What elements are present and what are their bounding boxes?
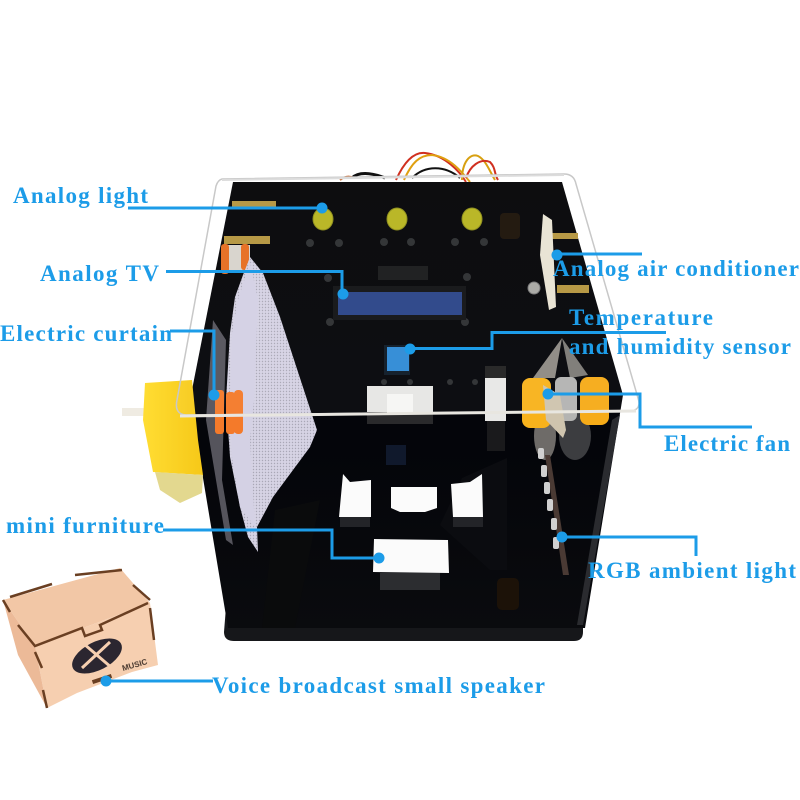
label: mini furniture: mini furniture xyxy=(6,513,164,538)
dim glow patches xyxy=(497,213,520,610)
mini furniture xyxy=(339,474,483,590)
label: Analog TV xyxy=(40,261,348,300)
electric curtain xyxy=(226,257,317,552)
label: RGB ambient light xyxy=(556,532,796,583)
label: Analog air conditioner: Analog air conditioner xyxy=(553,256,799,281)
wall-mounted white furniture xyxy=(367,366,506,451)
screws xyxy=(306,238,488,385)
right side edge xyxy=(577,415,620,625)
RGB LED strip xyxy=(538,448,569,575)
label: Electric curtain: Electric curtain xyxy=(0,321,172,346)
electric fan xyxy=(522,338,609,460)
label: Temperature and humidity sensor: Temperature xyxy=(569,305,713,330)
label: Electric fan xyxy=(542,388,790,456)
reflected sensor xyxy=(386,445,406,465)
analog TV screen xyxy=(333,266,466,320)
label: Analog TV: Analog TV xyxy=(40,261,159,286)
AC module xyxy=(528,214,556,310)
label: Electric fan: Electric fan xyxy=(664,431,790,456)
label: mini furniture xyxy=(6,513,384,564)
house model xyxy=(122,153,639,641)
brass standoffs xyxy=(224,201,589,293)
label: Analog light xyxy=(13,183,328,214)
temperature sensor xyxy=(384,345,410,375)
left wall panel xyxy=(206,320,233,545)
floor reflection xyxy=(440,458,507,570)
label: Voice broadcast small speaker: Voice broadcast small speaker xyxy=(212,673,545,698)
acrylic top xyxy=(176,174,639,415)
speaker box xyxy=(3,568,158,708)
base plate xyxy=(224,607,583,641)
wires xyxy=(340,153,498,182)
label: Electric curtain xyxy=(0,321,220,400)
label: Analog light: Analog light xyxy=(13,183,148,208)
label: RGB ambient light: RGB ambient light xyxy=(588,558,796,583)
orange pulley xyxy=(215,390,243,434)
speaker box: MUSIC xyxy=(121,657,149,673)
left pulley xyxy=(221,244,250,274)
analog lights xyxy=(313,208,482,230)
burnt box edges xyxy=(3,570,154,708)
yellow motor xyxy=(122,380,203,503)
label: Temperature and humidity sensor xyxy=(404,305,791,359)
label: Temperature and humidity sensor: and humidity sensor xyxy=(569,334,791,359)
black box xyxy=(190,182,623,628)
